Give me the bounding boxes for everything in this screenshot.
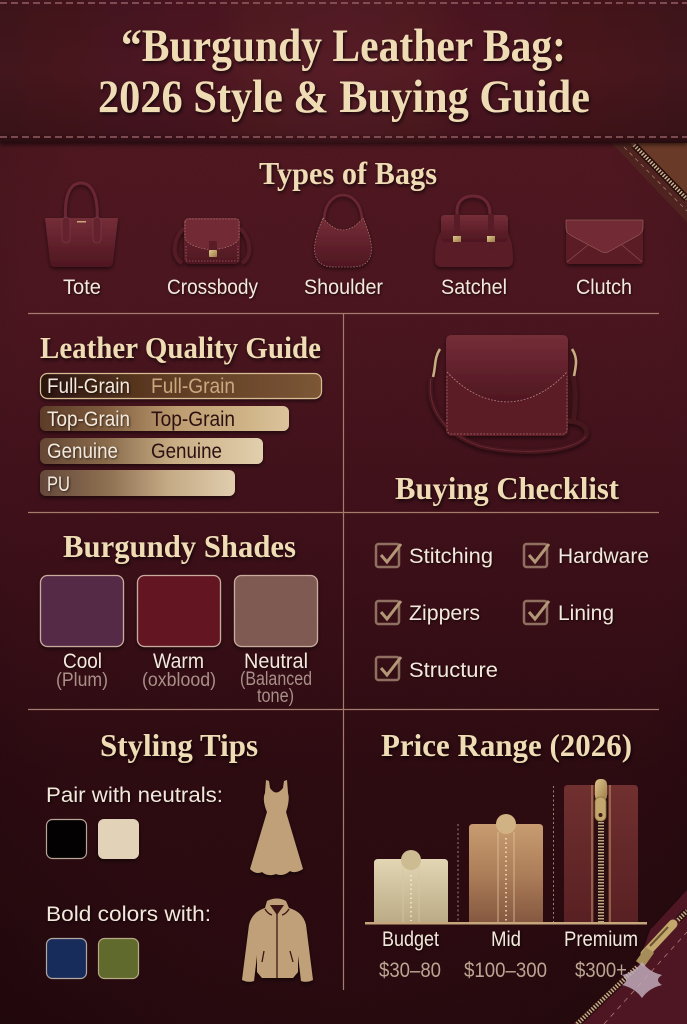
labels: price tiers: Premium — [564, 928, 638, 951]
labels: price tiers: $100–300 — [464, 959, 547, 982]
item: stitching — [376, 544, 493, 568]
item: zippers — [376, 601, 480, 625]
swatches: bold colors — [46, 938, 138, 978]
icon: sparkle watermark — [622, 962, 662, 998]
swatch: warm oxblood: (oxblood) — [142, 670, 216, 691]
labels: price tiers: $300+ — [575, 959, 627, 982]
item: lining — [524, 601, 614, 625]
swatch: neutral balanced tone: tone) — [257, 686, 294, 707]
bar: genuine: Genuine — [151, 440, 222, 463]
bar: pu — [40, 470, 235, 496]
text: pair with neutrals: Pair with neutrals: — [46, 784, 223, 807]
bar: pu: PU — [47, 473, 70, 496]
item: structure: Structure — [409, 659, 498, 682]
labels: price tiers — [379, 928, 638, 982]
panel: price range — [365, 727, 647, 982]
labels: price tiers: $30–80 — [379, 959, 441, 982]
illustration: crossbody bag — [430, 335, 587, 451]
heading: leather quality guide: Leather Quality Guide — [40, 330, 321, 365]
dotted separators — [458, 786, 554, 922]
icon: tote bag — [45, 183, 118, 267]
labels: price tiers: Budget — [382, 928, 439, 951]
bag labels: Shoulder — [304, 276, 383, 299]
bar: full-grain — [40, 374, 322, 398]
heading: buying checklist: Buying Checklist — [395, 470, 619, 506]
heading: styling tips: Styling Tips — [100, 727, 258, 763]
icon: crossbody bag — [175, 218, 249, 264]
heading: price range: Price Range (2026) — [381, 727, 632, 763]
bar: mid — [469, 814, 543, 922]
heading: burgundy shades: Burgundy Shades — [63, 528, 296, 564]
panel: buying checklist items — [376, 544, 649, 682]
zipper corner: bottom right — [573, 890, 687, 1024]
swatches: neutrals — [46, 819, 139, 859]
item: zippers: Zippers — [409, 602, 480, 625]
bar: full-grain: Full-Grain — [151, 375, 235, 398]
title: 2026 Style & Buying Guide — [98, 71, 590, 123]
bar: top-grain — [40, 406, 289, 431]
item: hardware — [524, 544, 649, 568]
labels: price tiers: Mid — [491, 928, 521, 951]
icon: dress — [250, 780, 303, 875]
swatch: warm oxblood: Warm — [153, 650, 204, 673]
swatch: cool plum: Cool — [63, 650, 102, 673]
swatch: neutral balanced tone: (Balanced — [240, 669, 312, 690]
icon: jacket — [242, 898, 313, 982]
bag labels — [63, 276, 632, 299]
bar: budget — [374, 850, 448, 922]
bar: genuine: Genuine — [47, 440, 118, 463]
heading: types of bags: Types of Bags — [259, 155, 437, 191]
bar: premium zipper — [564, 779, 638, 922]
title: “Burgundy Leather Bag: — [121, 20, 566, 72]
title — [98, 20, 590, 123]
icon: shoulder bag — [315, 195, 371, 267]
bar: top-grain: Top-Grain — [151, 408, 235, 431]
bar: top-grain: Top-Grain — [47, 408, 130, 431]
axis baseline — [365, 922, 647, 924]
panel: leather quality guide — [40, 330, 322, 496]
section dividers — [28, 313, 659, 990]
bag labels: Crossbody — [167, 276, 258, 299]
swatch: neutral balanced tone: Neutral — [244, 650, 308, 673]
panel: types of bags — [45, 183, 643, 299]
icon: satchel bag — [435, 196, 513, 267]
text: bold colors with: Bold colors with: — [46, 903, 211, 926]
bag labels: Clutch — [576, 276, 632, 299]
item: hardware: Hardware — [558, 545, 649, 568]
swatch: neutral balanced tone — [234, 576, 318, 707]
swatch: warm oxblood — [138, 576, 220, 691]
panel: burgundy shades — [40, 528, 318, 707]
bag labels: Satchel — [441, 276, 507, 299]
bag labels: Tote — [63, 276, 101, 299]
header banner — [0, 0, 687, 143]
item: stitching: Stitching — [409, 545, 493, 568]
swatch: cool plum: (Plum) — [56, 670, 108, 691]
icon: clutch bag — [566, 220, 643, 264]
item: lining: Lining — [558, 602, 614, 625]
bar: full-grain: Full-Grain — [47, 375, 130, 398]
swatch: cool plum — [40, 576, 124, 691]
bar: genuine — [40, 438, 263, 464]
zipper corner: top right — [612, 143, 687, 222]
item: structure — [376, 657, 498, 682]
panel: styling tips — [46, 727, 313, 982]
